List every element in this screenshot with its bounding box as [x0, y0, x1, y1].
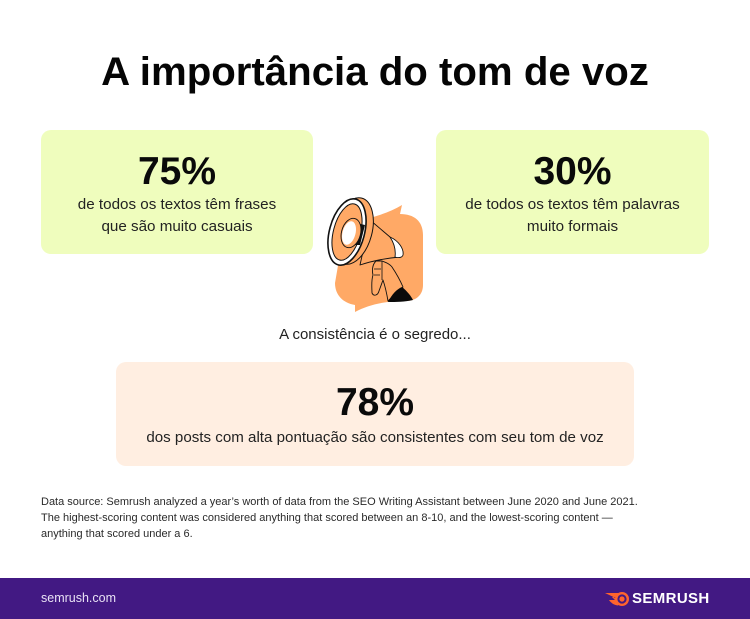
stat description: que são muito casuais	[101, 218, 253, 235]
stat description	[78, 196, 276, 235]
panel: 78% stat	[116, 362, 634, 466]
stat number: 75%	[138, 150, 216, 193]
stat description: de todos os textos têm frases	[78, 196, 276, 213]
footer band	[0, 578, 750, 619]
footer url: semrush.com	[41, 591, 116, 605]
panel: 75% stat	[41, 130, 313, 254]
caption: A consistência é o segredo...	[279, 326, 471, 343]
data source note: anything that scored under a 6.	[41, 528, 193, 540]
stat description: de todos os textos têm palavras	[465, 196, 680, 213]
title: A importância do tom de voz	[101, 49, 649, 94]
stat description: dos posts com alta pontuação são consistentes com seu tom de voz	[146, 429, 604, 446]
wordmark: SEMRUSH	[632, 590, 710, 607]
data source note: Data source: Semrush analyzed a year’s worth of data from the SEO Writing Assistant between June 2020 and June 2021.	[41, 496, 638, 508]
data source note	[41, 496, 638, 540]
stat description	[465, 196, 680, 235]
stat number: 30%	[533, 150, 612, 193]
data source note: The highest-scoring content was considered anything that scored between an 8-10, and the lowest-scoring content —	[41, 512, 613, 524]
stat number: 78%	[336, 381, 414, 424]
stat description: muito formais	[527, 218, 618, 235]
semrush logo	[605, 590, 710, 607]
panel: 30% stat	[436, 130, 709, 254]
icon: megaphone held in hand	[327, 197, 423, 312]
icon: semrush flame	[605, 592, 629, 606]
